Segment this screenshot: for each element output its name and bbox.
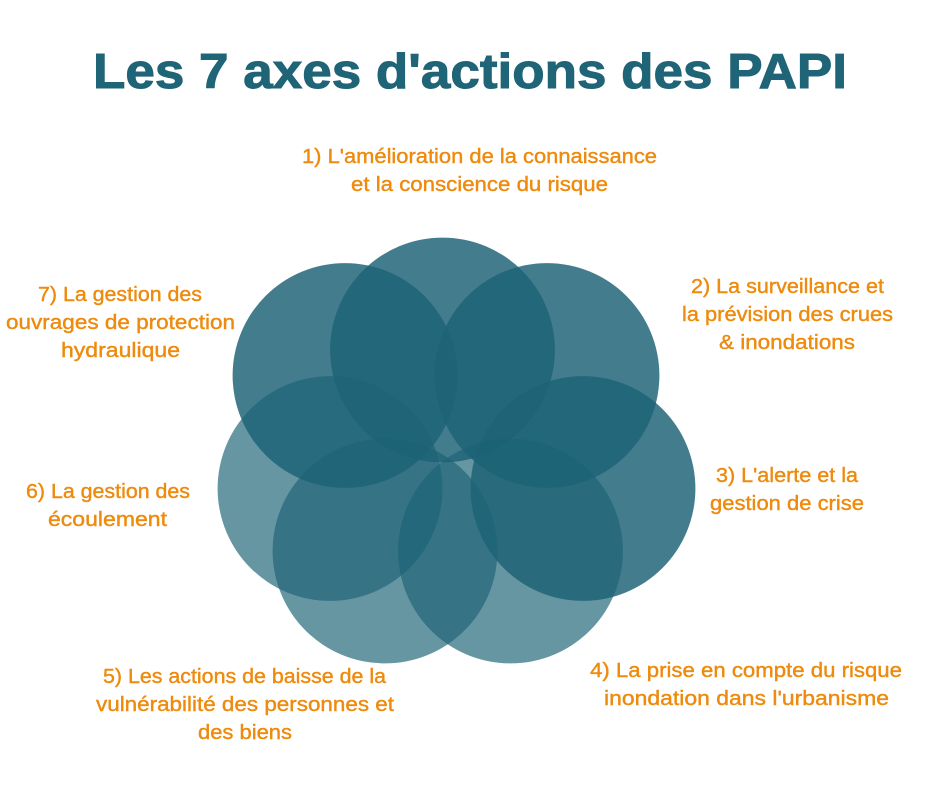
label: axis 1: et la conscience du risque (351, 173, 608, 196)
circle: axis 4 (398, 439, 623, 663)
label: axis 3 (710, 464, 864, 515)
label: axis 6 (26, 480, 190, 531)
label: axis 6: 6) La gestion des (26, 480, 190, 503)
circle: axis 5 (273, 439, 497, 663)
label: axis 4: inondation dans l'urbanisme (604, 687, 889, 710)
label: axis 7: ouvrages de protection (6, 311, 235, 334)
label: axis 7 (6, 283, 235, 362)
circle: axis 2 (435, 263, 659, 488)
label: axis 7: hydraulique (61, 339, 180, 362)
circle: axis 1 (330, 238, 555, 462)
label: axis 5: 5) Les actions de baisse de la (103, 665, 387, 688)
circle: axis 7 (233, 263, 457, 488)
label: axis 7: 7) La gestion des (38, 283, 202, 306)
label: axis 2: 2) La surveillance et (691, 275, 884, 298)
label: axis 1 (302, 145, 657, 196)
label: axis 5: vulnérabilité des personnes et (96, 693, 394, 716)
label: axis 4: 4) La prise en compte du risque (590, 659, 902, 682)
label: axis 5 (96, 665, 394, 744)
circle: axis 6 (218, 376, 442, 601)
label: axis 2: la prévision des crues (682, 303, 893, 326)
label: axis 2: & inondations (719, 331, 855, 354)
diagram: seven overlapping circles (218, 238, 695, 663)
label: axis 6: écoulement (48, 508, 167, 531)
label: axis 5: des biens (198, 721, 292, 744)
circle: axis 3 (471, 376, 695, 601)
label: axis 1: 1) L'amélioration de la connaissance (302, 145, 657, 168)
label: axis 3: gestion de crise (710, 492, 864, 515)
label: axis 2 (682, 275, 893, 354)
title: Les 7 axes d'actions des PAPI (93, 45, 847, 99)
label: axis 4 (590, 659, 902, 710)
label: axis 3: 3) L'alerte et la (716, 464, 859, 487)
